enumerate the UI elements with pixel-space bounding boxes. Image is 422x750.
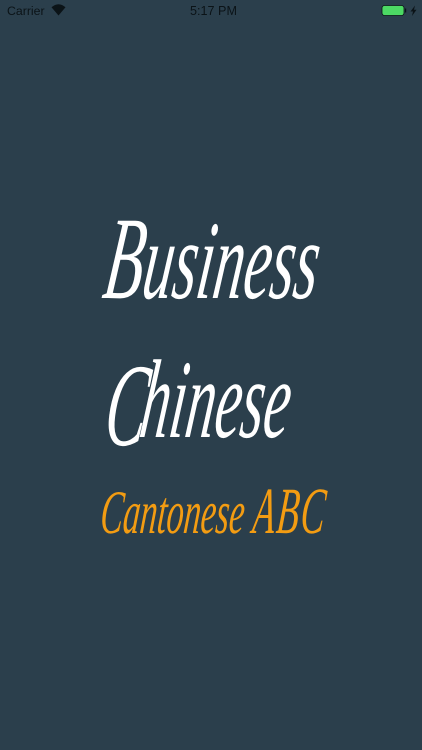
title line: Business: Business bbox=[98, 193, 329, 324]
title line: Chinese: hinese bbox=[134, 339, 299, 462]
title line: Chinese: C bbox=[99, 342, 158, 471]
icon: wifi bbox=[52, 4, 66, 16]
status bar bbox=[7, 4, 416, 18]
subtitle: Cantonese ABC: Cantonese ABC bbox=[98, 474, 331, 548]
icon: battery bbox=[382, 6, 406, 16]
carrier label: Carrier bbox=[7, 4, 45, 18]
icon: charging bolt bbox=[410, 6, 416, 16]
clock: 5:17 PM bbox=[190, 4, 237, 18]
